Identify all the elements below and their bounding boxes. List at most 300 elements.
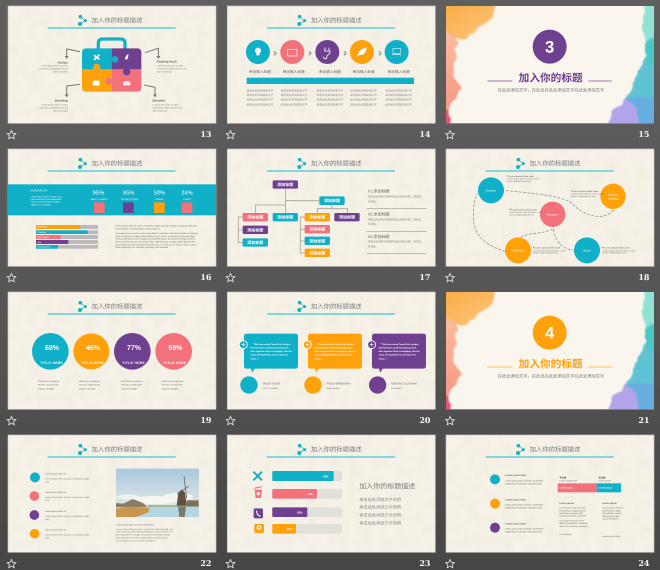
column text: Lorem ipsum [602, 502, 617, 505]
slide 22: list with photo [8, 435, 216, 552]
flow circles: Planning [608, 197, 618, 200]
list: Lorem ipsum dolor sit [45, 529, 66, 531]
photo caption [116, 524, 173, 542]
step labels: 单击输入标题 [283, 70, 305, 74]
progress bars [272, 471, 342, 534]
watercolor [446, 292, 654, 410]
labels: consectetur adipiscing elit, sed [38, 68, 68, 70]
footer: slide 21: 21 [638, 415, 650, 425]
descriptions: 单击此处添加段落文字 [385, 89, 412, 92]
labels: Branding [55, 99, 68, 102]
header [486, 158, 614, 172]
arrows [65, 48, 160, 97]
side list: 03.添加标题 [368, 234, 390, 239]
quotes: "This have many PowerPoint recipes [253, 343, 291, 346]
footer: slide 18: 18 [638, 272, 650, 282]
table [558, 476, 621, 492]
header: 加入你的标题描述 [530, 446, 580, 453]
notes: Lorem ipsum dolor amet [604, 247, 630, 249]
footer: slide 22: 22 [200, 558, 212, 568]
descriptions: 单击此处添加段落文字 [317, 103, 343, 106]
header [486, 444, 614, 458]
dashed paths [473, 191, 614, 251]
notes: Lorem ipsum dolor sit amet, conse [571, 193, 604, 195]
footer: slide 19 [7, 415, 212, 425]
slide 15: section divider 3 [446, 6, 654, 124]
side list: 处添加。 [368, 245, 379, 248]
step labels: 单击输入标题 [319, 70, 341, 74]
column text: Lorem ipsum [559, 533, 572, 536]
column text: velit esse molestie consequat [559, 525, 588, 528]
briefcase handle [98, 39, 125, 49]
side text: 单击此处添加文字说明 [359, 505, 401, 510]
header: 加入你的标题描述 [530, 160, 580, 167]
notes [507, 175, 636, 254]
table: 专业版 [598, 476, 605, 479]
notes: Lorem ipsum dolor sit amet, conse [509, 211, 543, 214]
flow circles: Outsider [486, 189, 496, 192]
notes: Lorem ipsum dolor amet [509, 175, 534, 178]
speech bubbles [239, 334, 426, 373]
slide 19: percentage circles [8, 292, 216, 409]
notes: Lorem ipsum dolor amet [511, 209, 537, 211]
fun facts text: Lorem ipsum dolor sit amet, sed [31, 196, 62, 198]
descriptions: 单击此处添加段落文字 [317, 98, 343, 101]
quotes: show..." [315, 358, 323, 360]
captions: Text her, sorted at the [162, 384, 183, 386]
step labels: 单击输入标题 [353, 70, 375, 74]
progress bars: Marketing [37, 226, 47, 228]
descriptions: 单击此处添加段落文字 [350, 103, 377, 106]
org boxes: 添加标题 [277, 182, 293, 187]
side list [367, 189, 427, 254]
org boxes: 添加标题 [309, 251, 325, 255]
icons [253, 472, 264, 533]
list: Lorem ipsum dolor [505, 474, 526, 477]
step labels: 单击输入标题 [249, 70, 271, 74]
captions: Text her, sorted at the [79, 384, 100, 386]
step labels: 单击输入标题 [388, 70, 410, 74]
org boxes: 添加标题 [247, 228, 263, 232]
list: Lorem ipsum dolor sit amet, consectetur [505, 480, 544, 482]
paragraph: mod tincidunt ut laoreet dolore magna aliquam. [115, 228, 161, 230]
side list: 02.添加标题 [368, 212, 390, 216]
side text: 单击此处添加文字说明 [359, 497, 401, 502]
percent circles: TITLE HERE [81, 361, 104, 365]
fun facts text: cidunt ut laoreet dolore magna [31, 201, 60, 203]
progress bars: 85% [323, 475, 329, 478]
header: 加入你的标题描述 [311, 17, 362, 24]
descriptions: 单击此处添加段落文字 [247, 98, 273, 101]
column text: ut laoreet dolore [602, 518, 618, 520]
header [48, 15, 176, 29]
list: Lorem ipsum dolor sit amet, consectetur adipis [45, 496, 90, 499]
slide 21: section divider 4 [446, 292, 654, 410]
captions: sceptive; thought [38, 388, 54, 390]
photo caption: Lorem ipsum dolor sit amet, consectetur adipiscing elit, sed [116, 528, 173, 531]
quotes: fans anymore than in snapping. Use the [379, 350, 420, 353]
side text [359, 483, 415, 525]
list: Lorem ipsum dolor sit [45, 491, 66, 494]
subtitle: 在此处添加文字，在此处在此处添加文字在此处添加文字 [498, 374, 604, 379]
percent circles: 59% [168, 344, 182, 352]
descriptions: 单击此处添加段落文字 [385, 98, 412, 101]
table: Lorem ipsum dolor [559, 480, 578, 482]
descriptions: 单击此处添加段落文字 [281, 89, 307, 92]
org boxes: 添加标题 [324, 198, 340, 203]
header: 加入你的标题描述 [311, 303, 362, 310]
step circles [246, 40, 409, 64]
paragraph: issim qui blandit praesent luptatum zzril delenit augue duis dolore te feugait nulla fa [115, 238, 195, 240]
notes: ctetuer adipiscing elit sed [509, 214, 534, 216]
list [490, 474, 544, 533]
column text: consectetuer adipis [602, 510, 621, 512]
footer: slide 16: 16 [200, 272, 212, 282]
stats: 24% [181, 189, 193, 196]
progress bars: Web Design [37, 236, 49, 239]
notes: Lorem ipsum dolor amet [573, 190, 599, 193]
descriptions: 单击此处添加段落文字 [281, 94, 307, 97]
slide 18: dashed flow diagram [446, 149, 654, 266]
footer: slide 14 [226, 129, 431, 139]
column text: dolor in hendrerit in vulputate [559, 522, 587, 525]
quotes: that has been used that juicing more [315, 347, 352, 349]
org boxes: 添加标题 [309, 239, 325, 243]
column text: Lorem ipsum [559, 502, 574, 505]
column text: euismod tincidunt ut laoreet [559, 515, 586, 517]
column text: Lorem ipsum dolor sit amet, [559, 507, 586, 509]
descriptions: 单击此处添加段落文字 [385, 94, 412, 97]
subtitle: 在此处添加文字，在此处在此处添加文字在此处添加文字 [498, 88, 604, 93]
descriptions: 单击此处添加段落文字 [317, 94, 343, 97]
footer: slide 17 [226, 272, 430, 282]
org boxes: 添加标题 [277, 215, 293, 220]
list: Lorem ipsum dolor sit amet, consectetur adipis [45, 515, 90, 518]
header [48, 158, 176, 172]
progress bars: Planning [37, 231, 46, 234]
stats: PROJECT DONE [121, 198, 138, 201]
labels: Lorem ipsum dolor sit amet, [41, 65, 68, 67]
captions: sceptive; thought [121, 388, 137, 390]
percent circles [32, 333, 192, 370]
org boxes: 添加标题 [247, 240, 263, 245]
people: CEO & Founder [263, 387, 278, 390]
chevrons [274, 51, 381, 55]
descriptions: 单击此处添加段落文字 [317, 89, 343, 92]
progress bars [36, 225, 98, 249]
table: Lorem ipsum [598, 480, 611, 482]
descriptions: 单击此处添加段落文字 [281, 98, 307, 101]
photo caption: quis nostrud exerci tation ullamcorper suscipit lobortis [116, 537, 168, 539]
header [48, 444, 176, 458]
labels: Design [58, 61, 68, 64]
windmill photo [116, 469, 199, 517]
section title: 加入你的标题 [519, 72, 583, 84]
number circle: 4 [545, 324, 554, 342]
org boxes: 添加标题 [309, 215, 325, 220]
slide 17: organisation chart [227, 149, 435, 266]
flow circles: Strategic [608, 193, 618, 196]
fun facts text [31, 189, 62, 206]
labels: consectetur adipiscing elit, sed [157, 68, 186, 70]
captions: Short here to add your [121, 380, 143, 383]
side list: 请在此处添加内容请在此处添加内容。请在此 [368, 218, 421, 221]
watercolor [446, 6, 654, 124]
progress bars: 75% [307, 493, 313, 496]
stats: 85% [123, 189, 134, 196]
percent circles: TITLE HERE [164, 361, 186, 365]
stats: 95% [93, 189, 104, 196]
quotes [251, 343, 420, 360]
flow circles [478, 177, 626, 263]
percent circles: TITLE HERE [122, 361, 145, 365]
percent circles: TITLE HERE [40, 361, 63, 365]
photo caption: nisl ut aliquip ex ea commodo consequat [116, 540, 155, 542]
captions: Short here to add your [162, 380, 184, 383]
notes: Lorem ipsum dolor sit amet, conse [602, 250, 636, 252]
people: Sales Lawyer [327, 387, 340, 390]
descriptions: 单击此处添加段落文字 [385, 103, 412, 106]
notes: ctetuer adipiscing elit sed [602, 252, 627, 254]
section title: 加入你的标题 [519, 358, 583, 370]
footer: slide 18 [446, 272, 650, 282]
list: Lorem ipsum dolor [505, 522, 526, 525]
stats [91, 189, 193, 213]
footer: slide 13: 13 [200, 129, 212, 139]
side list: 请在此处添加内容请在此处添加内容。请在此 [368, 240, 421, 243]
footer: slide 23: 23 [419, 558, 431, 568]
notes: ctetuer adipiscing elit sed [571, 195, 595, 198]
labels: consectetur adipiscing elit, sed [38, 107, 68, 109]
slide 23: bars with icons [227, 435, 435, 552]
labels: diam nonummy [157, 71, 172, 73]
notes: Lorem ipsum dolor sit amet, conse [507, 178, 540, 180]
descriptions: 单击此处添加段落文字 [350, 89, 377, 92]
column text: Duis autem vel eum iriure [559, 520, 584, 522]
list: cing [45, 537, 49, 539]
quotes: name of PowerPoint in the way. Fine [315, 354, 352, 356]
paragraph: cilisi. Nam liber tempor cum soluta nobis eleifend option congue nihil imperdiet dom [115, 241, 195, 243]
people [240, 376, 417, 394]
fun facts text: FUN FACTS [31, 189, 47, 192]
list: Lorem ipsum dolor sit [45, 473, 66, 475]
percent circles: 68% [45, 344, 59, 352]
column text: Lorem ipsum dolor sit [602, 507, 623, 509]
list: adipiscing elit sed diam nonummy nibh [505, 531, 542, 533]
labels: Lorem ipsum dolor sit amet, [41, 104, 68, 106]
labels: diam nonummy [53, 71, 68, 73]
side text: 加入你的标题描述 [359, 483, 415, 490]
quotes: show..." [251, 358, 259, 360]
paragraph: vel illum dolore eu feugiat nulla facilisis at vero eros et accumsan et iusto odio dign [115, 235, 195, 238]
quotes: name of PowerPoint in the way. Fine [379, 354, 416, 356]
people: Martin Smith [263, 382, 280, 386]
header: 加入你的标题描述 [92, 160, 142, 167]
number circle [533, 316, 567, 350]
notes: ctetuer adipiscing elit sed [533, 252, 557, 254]
puzzle briefcase [82, 48, 141, 92]
descriptions: 单击此处添加段落文字 [247, 103, 273, 106]
paragraph [115, 225, 197, 249]
org boxes: 添加标题 [309, 227, 325, 232]
quotes: that has been used that juicing more [379, 347, 416, 349]
photo caption: Lorem ipsum dolor sit amet consectetur [116, 524, 154, 526]
people: Paula Williamson [327, 382, 351, 386]
teal bar [247, 78, 414, 84]
slide 20: testimonials [227, 292, 435, 409]
title rules [487, 80, 612, 82]
labels: Reading Book [157, 60, 177, 63]
fun facts text: aliquam erat volutpat [31, 204, 51, 206]
step labels [249, 70, 410, 74]
side list: 处添加。 [368, 223, 379, 226]
descriptions [247, 89, 412, 106]
org boxes [243, 180, 360, 257]
table: Lorem ipsum [559, 487, 573, 489]
quotes: name of PowerPoint in the way. Fine [251, 354, 288, 356]
side text: 单击此处添加文字说明 [359, 513, 401, 517]
people: Mathias Cuzimoen [391, 382, 417, 386]
header [48, 301, 176, 315]
percent circles: 77% [127, 344, 141, 352]
captions: sceptive; thought [162, 388, 178, 390]
number circle [533, 30, 567, 64]
photo caption: diam nonummy nibh euismod tincidunt ut laoreet dolore ma [116, 531, 173, 533]
quotes: "This have many PowerPoint recipes [381, 343, 419, 346]
footer: slide 16 [7, 272, 212, 282]
connectors [238, 189, 348, 253]
descriptions: 单击此处添加段落文字 [247, 94, 273, 97]
footer: slide 23 [226, 558, 431, 568]
list: Lorem ipsum dolor sit amet, consectetur adipis [45, 534, 90, 536]
footer: slide 15: 15 [638, 129, 650, 139]
slide 24: list with pricing table [446, 435, 654, 552]
list: cing [45, 499, 49, 502]
teal band [8, 184, 216, 215]
footer: slide 17: 17 [419, 272, 430, 282]
footer: slide 13 [7, 129, 212, 139]
slide 16: fun facts [8, 149, 216, 266]
header: 加入你的标题描述 [92, 446, 142, 453]
header [267, 158, 395, 172]
labels: diam nonummy [53, 110, 68, 112]
side list: 处添加。 [368, 200, 379, 203]
notes: Lorem ipsum dolor sit amet, conse [533, 250, 566, 252]
flow circles: Research [547, 213, 558, 216]
people: Consultant [391, 387, 401, 390]
org boxes: 添加标题 [247, 215, 263, 220]
list: Lorem ipsum dolor sit amet, consectetur [505, 504, 544, 506]
footer: slide 24 [446, 558, 650, 568]
header: 加入你的标题描述 [92, 303, 142, 310]
quotes: show..." [379, 358, 387, 360]
flow circles: Planning [513, 249, 523, 252]
footer: slide 21 [446, 415, 650, 425]
header: 加入你的标题描述 [311, 160, 362, 167]
captions: Short here to add your [79, 380, 101, 383]
title rules [487, 366, 612, 368]
stats: AWARD [155, 198, 163, 201]
table: Lorem ipsum [598, 487, 612, 489]
side list: 01.添加标题 [368, 189, 390, 194]
column text: sed diam nonummy nibh [559, 512, 583, 515]
table: 专业版 [559, 476, 566, 479]
footer: slide 19: 19 [200, 415, 212, 425]
header: 加入你的标题描述 [311, 446, 362, 453]
labels: consectetur adipiscing elit, sed [152, 107, 182, 109]
slide 14: five step process [227, 6, 435, 123]
percent circles: 45% [86, 344, 100, 352]
stats: HAPPY CLIENTS [91, 198, 108, 201]
footer: slide 14: 14 [419, 129, 431, 139]
side list: 请在此处添加内容请在此处添加内容。请在此 [368, 195, 421, 198]
labels: Lorem ipsum dolor sit amet, [152, 104, 179, 106]
list: adipiscing elit sed diam nonummy nibh [505, 483, 542, 485]
descriptions: 单击此处添加段落文字 [350, 98, 377, 101]
stats: CLIENT [183, 198, 191, 201]
captions: Text her, sorted at the [121, 384, 142, 386]
column text: consectetuer adipiscing elit, [559, 510, 586, 512]
quotes: fans anymore than in snapping. Use the [315, 350, 356, 353]
side text: 单击此处添加文字说明 [359, 521, 401, 525]
notes: ctetuer adipiscing elit sed [507, 180, 531, 183]
captions: Short here to add your [38, 380, 60, 383]
labels: Lorem ipsum dolor sit amet, [157, 65, 183, 67]
progress bars: Development [37, 246, 50, 248]
captions: Text her, sorted at the [38, 384, 59, 386]
list: cing [45, 518, 49, 521]
footer: slide 20: 20 [419, 415, 431, 425]
captions [38, 380, 184, 390]
progress bars: 55% [297, 511, 303, 514]
progress bars: 35% [287, 528, 292, 531]
list [29, 472, 90, 539]
slide 13: puzzle briefcase [8, 6, 216, 123]
fun facts text: diam nonummy nibh euismod tin [31, 198, 62, 201]
column text: nibh euismod tinci [602, 515, 620, 518]
list: Lorem ipsum dolor [505, 498, 526, 501]
descriptions: 单击此处添加段落文字 [281, 103, 307, 106]
list: Lorem ipsum dolor sit [45, 510, 66, 513]
descriptions: 单击此处添加段落文字 [350, 94, 377, 97]
quotes: that has been used that juicing more [251, 347, 288, 349]
list: Lorem ipsum dolor sit amet, consectetur [505, 528, 544, 530]
paragraph: Lorem ipsum dolor sit amet, consectetur adipiscing elit, sed diam nonummy nibh euis [115, 225, 197, 227]
footer: slide 24: 24 [638, 558, 650, 568]
footer: slide 15 [446, 129, 650, 139]
header: 加入你的标题描述 [92, 17, 142, 24]
column text: Lorem ipsum dolor [602, 535, 621, 538]
labels: Situation [152, 99, 165, 102]
number circle: 3 [545, 38, 554, 56]
labels: diam nonummy [152, 110, 167, 112]
labels [38, 60, 186, 112]
quotes: fans anymore than in snapping. Use the [251, 350, 292, 353]
list: adipiscing elit sed diam nonummy nibh [505, 507, 542, 509]
progress bars: App [37, 241, 41, 244]
header [267, 301, 395, 315]
org boxes: 添加标题 [339, 215, 355, 220]
column text [559, 502, 623, 538]
list: cing [45, 481, 49, 483]
footer: slide 20 [226, 415, 431, 425]
footer: slide 22 [7, 558, 212, 568]
column text: elit sed diam nonum [602, 512, 622, 515]
list: Lorem ipsum dolor sit amet, consectetur adipis [45, 478, 90, 480]
paragraph: tetuer adipiscing elit, sed diam nonummy nibh euismod. [115, 246, 169, 249]
descriptions: 单击此处添加段落文字 [247, 89, 273, 92]
photo caption: gna aliquam erat volutpat. Ut wisi enim ad minim veniam [116, 534, 170, 536]
